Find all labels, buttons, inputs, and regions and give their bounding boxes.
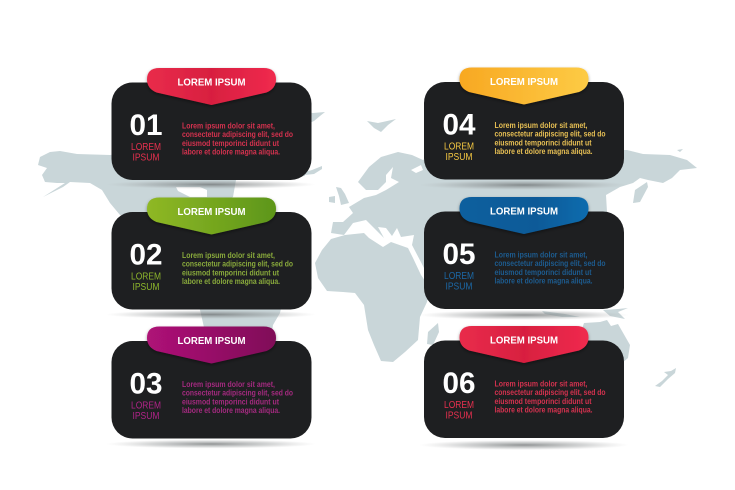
- map: Australia: [580, 320, 630, 365]
- map: Ireland: [329, 196, 335, 203]
- map: Greenland edge: [305, 112, 325, 125]
- panel: card 01: [112, 68, 312, 180]
- body text 02: eiusmod temporinci didunt ut: [182, 268, 279, 277]
- body text 05: [494, 250, 606, 286]
- side label 04: IPSUM: [446, 151, 472, 163]
- panel: card 02: [112, 198, 312, 310]
- body text 03: Lorem ipsum dolor sit amet,: [182, 380, 275, 389]
- map: Kamchatka-side island: [633, 182, 648, 203]
- banner tab 04: [460, 68, 588, 104]
- side label 01: IPSUM: [132, 152, 160, 164]
- banner title 06: LOREM IPSUM: [490, 334, 558, 346]
- map: Svalbard island: [367, 119, 396, 132]
- map: Eurasia: [331, 150, 697, 300]
- body text 05: Lorem ipsum dolor sit amet,: [494, 250, 588, 260]
- map: Canada island: [305, 166, 322, 175]
- map: South America: [198, 304, 282, 345]
- shadow: card 03: [106, 440, 316, 448]
- number 02: 02: [130, 238, 162, 272]
- side label 05: [444, 270, 474, 292]
- side label 02: LOREM: [131, 270, 161, 282]
- number 04: 04: [442, 108, 476, 142]
- map: Africa: [315, 233, 430, 362]
- body text 01: labore et dolore magna aliqua.: [182, 148, 280, 157]
- body text 04: labore et dolore magna aliqua.: [494, 147, 592, 156]
- body text 02: labore et dolore magna aliqua.: [182, 277, 280, 286]
- side label 02: IPSUM: [132, 281, 160, 293]
- body text 03: consectetur adipiscing elit, sed do: [182, 389, 293, 398]
- banner title 03: LOREM IPSUM: [178, 335, 246, 347]
- body text 06: labore et dolore magna aliqua.: [494, 406, 592, 415]
- banner title 02: LOREM IPSUM: [178, 206, 246, 218]
- shadow: card 01: [106, 180, 316, 189]
- side label 06: LOREM: [444, 399, 474, 411]
- body text 04: [494, 121, 606, 156]
- map: small north-east island: [677, 149, 683, 152]
- side label 01: [131, 141, 161, 164]
- body text 04: Lorem ipsum dolor sit amet,: [494, 121, 588, 130]
- panel: card 05: [424, 197, 624, 309]
- banner tab 01: [147, 68, 276, 105]
- number 05: 05: [442, 238, 476, 271]
- side label 06: [444, 399, 474, 422]
- body text 06: Lorem ipsum dolor sit amet,: [494, 380, 588, 388]
- side label 05: LOREM: [444, 270, 474, 282]
- body text 06: consectetur adipiscing elit, sed do: [494, 388, 606, 397]
- panel: card 04: [424, 68, 624, 180]
- side label 06: IPSUM: [446, 410, 472, 422]
- shadow: card 06: [419, 440, 629, 450]
- body text 03: eiusmod temporinci didunt ut: [182, 397, 279, 406]
- shadow: card 05: [419, 310, 629, 320]
- body text 01: consectetur adipiscing elit, sed do: [182, 130, 293, 139]
- banner title 04: LOREM IPSUM: [490, 76, 558, 88]
- panel: card 03: [112, 326, 312, 438]
- number 01: 01: [130, 109, 162, 142]
- side label 04: [444, 140, 474, 163]
- body text 04: eiusmod temporinci didunt ut: [494, 138, 592, 147]
- side label 03: LOREM: [131, 400, 161, 412]
- body text 03: labore et dolore magna aliqua.: [182, 406, 280, 415]
- body text 02: Lorem ipsum dolor sit amet,: [182, 251, 275, 260]
- side label 03: [131, 400, 161, 422]
- number 06: 06: [442, 367, 476, 400]
- map: North America: [38, 130, 305, 215]
- map: Indonesia islands: [542, 308, 628, 319]
- side label 01: LOREM: [131, 141, 161, 153]
- number 03: 03: [130, 368, 162, 400]
- banner tab 02: [147, 198, 276, 234]
- side label 03: IPSUM: [132, 410, 160, 422]
- banner tab 03: [147, 326, 276, 364]
- shadow: card 04: [419, 180, 629, 190]
- banner title 05: LOREM IPSUM: [490, 206, 558, 218]
- body text 01: Lorem ipsum dolor sit amet,: [182, 122, 275, 130]
- body text 02: [182, 251, 293, 286]
- body text 01: eiusmod temporinci didunt ut: [182, 139, 279, 148]
- body text 05: labore et dolore magna aliqua.: [494, 277, 592, 286]
- map: Great Britain: [336, 187, 349, 205]
- body text 03: [182, 380, 293, 415]
- map: Madagascar: [427, 323, 439, 345]
- side label 05: IPSUM: [446, 280, 472, 292]
- banner tab 06: [460, 326, 588, 363]
- body text 05: eiusmod temporinci didunt ut: [494, 268, 592, 277]
- panel: card 06: [424, 326, 624, 438]
- body text 01: [182, 122, 293, 157]
- body text 04: consectetur adipiscing elit, sed do: [494, 130, 606, 139]
- body text 06: eiusmod temporinci didunt ut: [494, 397, 592, 406]
- banner tab 05: [460, 197, 588, 234]
- banner title 01: LOREM IPSUM: [178, 76, 246, 88]
- body text 06: [494, 380, 606, 415]
- body text 02: consectetur adipiscing elit, sed do: [182, 260, 293, 269]
- map cutouts: water: [176, 165, 423, 197]
- shadow: card 02: [106, 310, 316, 319]
- map: New Zealand: [655, 368, 676, 387]
- side label 04: LOREM: [444, 140, 474, 152]
- side label 02: [131, 270, 161, 293]
- body text 05: consectetur adipiscing elit, sed do: [494, 259, 606, 268]
- world map: [38, 112, 697, 387]
